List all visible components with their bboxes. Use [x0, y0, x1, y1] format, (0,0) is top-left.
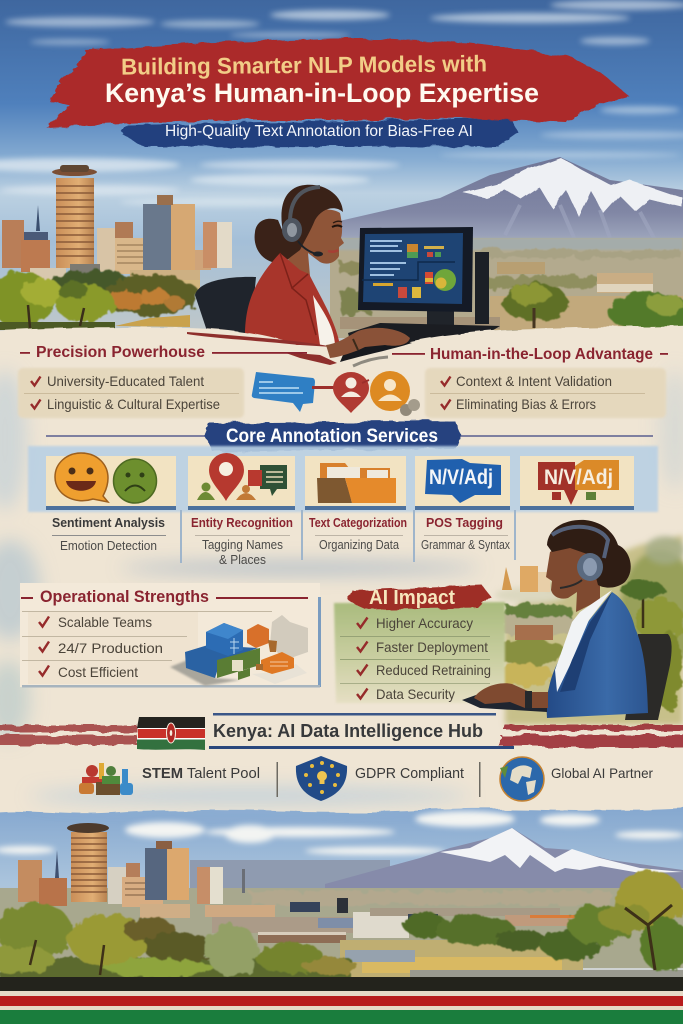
skyline towers: [2, 165, 232, 290]
chair: [195, 277, 256, 340]
list item: Reduced Retraining: Reduced Retraining: [376, 662, 491, 678]
panel: human-in-the-loop list: [425, 368, 666, 418]
woman with headset in red shirt: [195, 185, 344, 345]
trees right: [502, 283, 683, 332]
card: POS tagging alternate: N/V/Adj: [544, 466, 613, 489]
list item: Faster Deployment: Faster Deployment: [376, 639, 488, 655]
list item: Data Security: Data Security: [376, 686, 455, 702]
hair: [547, 520, 631, 588]
plains and distant city: [330, 238, 683, 338]
mountain: [335, 157, 683, 250]
trees and fields: [0, 870, 683, 980]
label: Sentiment Analysis: [52, 515, 166, 553]
heading banner: Core Annotation Services: [46, 421, 653, 451]
title line 1: Building Smarter NLP Models with: [121, 50, 487, 80]
label: Sentiment Analysis: Sentiment Analysis: [52, 515, 165, 530]
feature: GDPR Compliant: [296, 756, 465, 801]
brush: red title stroke: [46, 38, 629, 127]
title banner: [46, 38, 629, 147]
list item: Higher Accuracy: Higher Accuracy: [376, 615, 473, 631]
card: POS tagging: [415, 456, 510, 510]
icon: happy face: [55, 453, 108, 502]
monitor with annotation dashboard: [348, 227, 500, 345]
label: Sentiment Analysis: Emotion Detection: [60, 539, 157, 553]
label: Entity Recognition: Tagging Names: [202, 538, 283, 552]
service dividers: [181, 510, 515, 563]
right landscape behind analyst: [490, 535, 683, 725]
feature: STEM Talent Pool: STEM Talent Pool: [142, 765, 260, 782]
keyboard, hand and wristband: [462, 695, 547, 712]
label: Text Categorization: Text Categorization: [309, 515, 407, 530]
list item: Context & Intent Validation: Context & Intent Validation: [456, 373, 612, 389]
watercolor washes: [0, 370, 683, 805]
icon: EU stars shield: [296, 756, 347, 801]
banner: Kenya AI Data Intelligence Hub: [0, 713, 683, 750]
card: text categorization: [305, 456, 406, 510]
heading banner: Core Annotation Services: Core Annotation Services: [226, 426, 438, 447]
list item: Cost Efficient: Cost Efficient: [58, 664, 138, 680]
label: POS Tagging: POS Tagging: [426, 515, 503, 530]
chair: [625, 634, 672, 720]
headset: [290, 187, 320, 222]
blazer: [546, 592, 648, 718]
shirt and collar: [555, 590, 612, 692]
red brush streaks under woman's arm: [187, 332, 337, 365]
heading: AI Impact: AI Impact: [369, 587, 455, 609]
icon: human-in-the-loop speech bubble and people: [252, 371, 420, 416]
list item: 24/7 Production: 24/7 Production: [58, 640, 163, 656]
Kenyan flag stripes footer: [0, 977, 683, 1024]
brush: blue subtitle stroke: [122, 118, 518, 147]
label: POS Tagging: Grammar & Syntax: [421, 538, 511, 552]
heading: Human-in-the-Loop Advantage: Human-in-the-Loop Advantage: [430, 346, 653, 363]
panel: operational strengths: [20, 583, 321, 688]
card: entity recognition: [188, 453, 295, 510]
clouds: [0, 0, 683, 207]
ground and trunks: [0, 305, 190, 330]
hair: [255, 185, 343, 263]
neck and face: [288, 209, 344, 276]
label: Text Categorization: [309, 515, 407, 552]
mountain: [190, 828, 683, 890]
parchment main panel: [0, 326, 683, 813]
card: POS tagging alternate: [520, 456, 634, 510]
heading: Operational Strengths: Operational Strengths: [40, 587, 209, 606]
banner: Kenya AI Data Intelligence Hub: Kenya: AI Data Intelligence Hub: [213, 721, 483, 741]
list item: Linguistic & Cultural Expertise: Linguistic & Cultural Expertise: [47, 396, 220, 412]
face and neck: [546, 542, 600, 612]
feature: Global AI Partner: Global AI Partner: [551, 765, 653, 781]
top scene: Nairobi skyline and sky: [0, 0, 683, 345]
skyline towers: [18, 823, 245, 918]
clouds: [0, 811, 683, 855]
label: Entity Recognition: [191, 515, 293, 567]
bottom scene: Nairobi skyline with Mount Kenya: [0, 795, 683, 1024]
heading: AI Impact: [348, 585, 490, 610]
trees left: [0, 270, 200, 328]
shirt: [245, 253, 340, 345]
woman's arm and hand reaching keyboard: [326, 328, 412, 366]
panel: precision list: [18, 368, 244, 418]
card: POS tagging: N/V/Adj: [429, 466, 493, 489]
icon: STEM pieces: [79, 763, 133, 795]
subtitle: High-Quality Text Annotation for Bias-Free AI: [165, 123, 473, 140]
title line 2: Kenya’s Human-in-Loop Expertise: [105, 78, 539, 108]
icon: sad face: [114, 459, 156, 503]
headset: [552, 527, 608, 558]
analyst woman in blue blazer: [462, 520, 672, 720]
feature: STEM Talent Pool: [79, 763, 260, 795]
label: Entity Recognition: Entity Recognition: [191, 515, 293, 530]
feature: Global AI Partner: [500, 757, 653, 801]
panel: AI impact: [334, 585, 505, 703]
card: sentiment analysis: [46, 453, 176, 510]
icon: Kenyan flag: [137, 717, 205, 750]
list item: University-Educated Talent: University-Educated Talent: [47, 373, 204, 389]
label: Text Categorization: Organizing Data: [319, 538, 399, 552]
list item: Scalable Teams: Scalable Teams: [58, 614, 152, 630]
heading: Precision Powerhouse: Precision Powerhouse: [36, 344, 205, 361]
list item: Eliminating Bias & Errors: Eliminating Bias & Errors: [456, 396, 596, 412]
label: POS Tagging: [421, 515, 511, 552]
icon: globe: [500, 757, 544, 801]
feature: GDPR Compliant: GDPR Compliant: [355, 765, 465, 782]
icon: isometric data-centre blocks: [170, 615, 308, 686]
label: Entity Recognition: & Places: [219, 553, 266, 567]
panel: services frame: [28, 446, 658, 512]
plains and low-rise city: [0, 888, 683, 968]
